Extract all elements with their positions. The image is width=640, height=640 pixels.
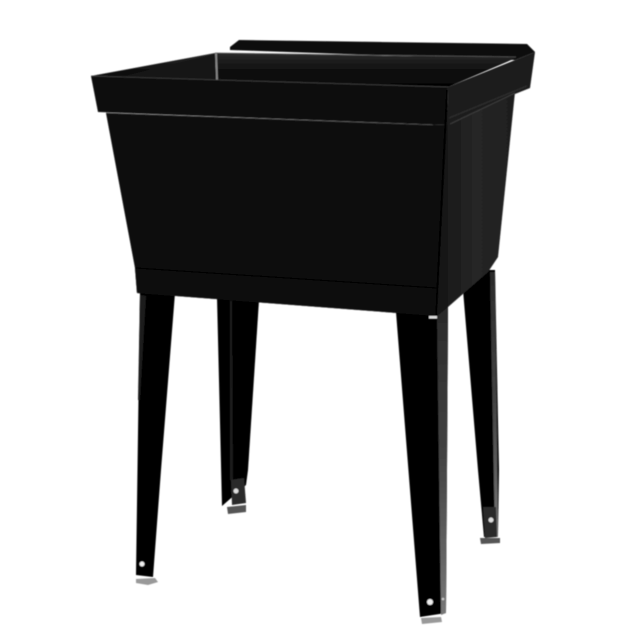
tub right side wall [436, 52, 535, 316]
front right leg [396, 305, 448, 624]
back left leg [217, 297, 259, 514]
tub front face [91, 76, 448, 316]
tub interior [91, 53, 516, 87]
front left leg [136, 291, 175, 585]
back right leg [463, 270, 500, 544]
tub back splash rim [230, 40, 535, 60]
